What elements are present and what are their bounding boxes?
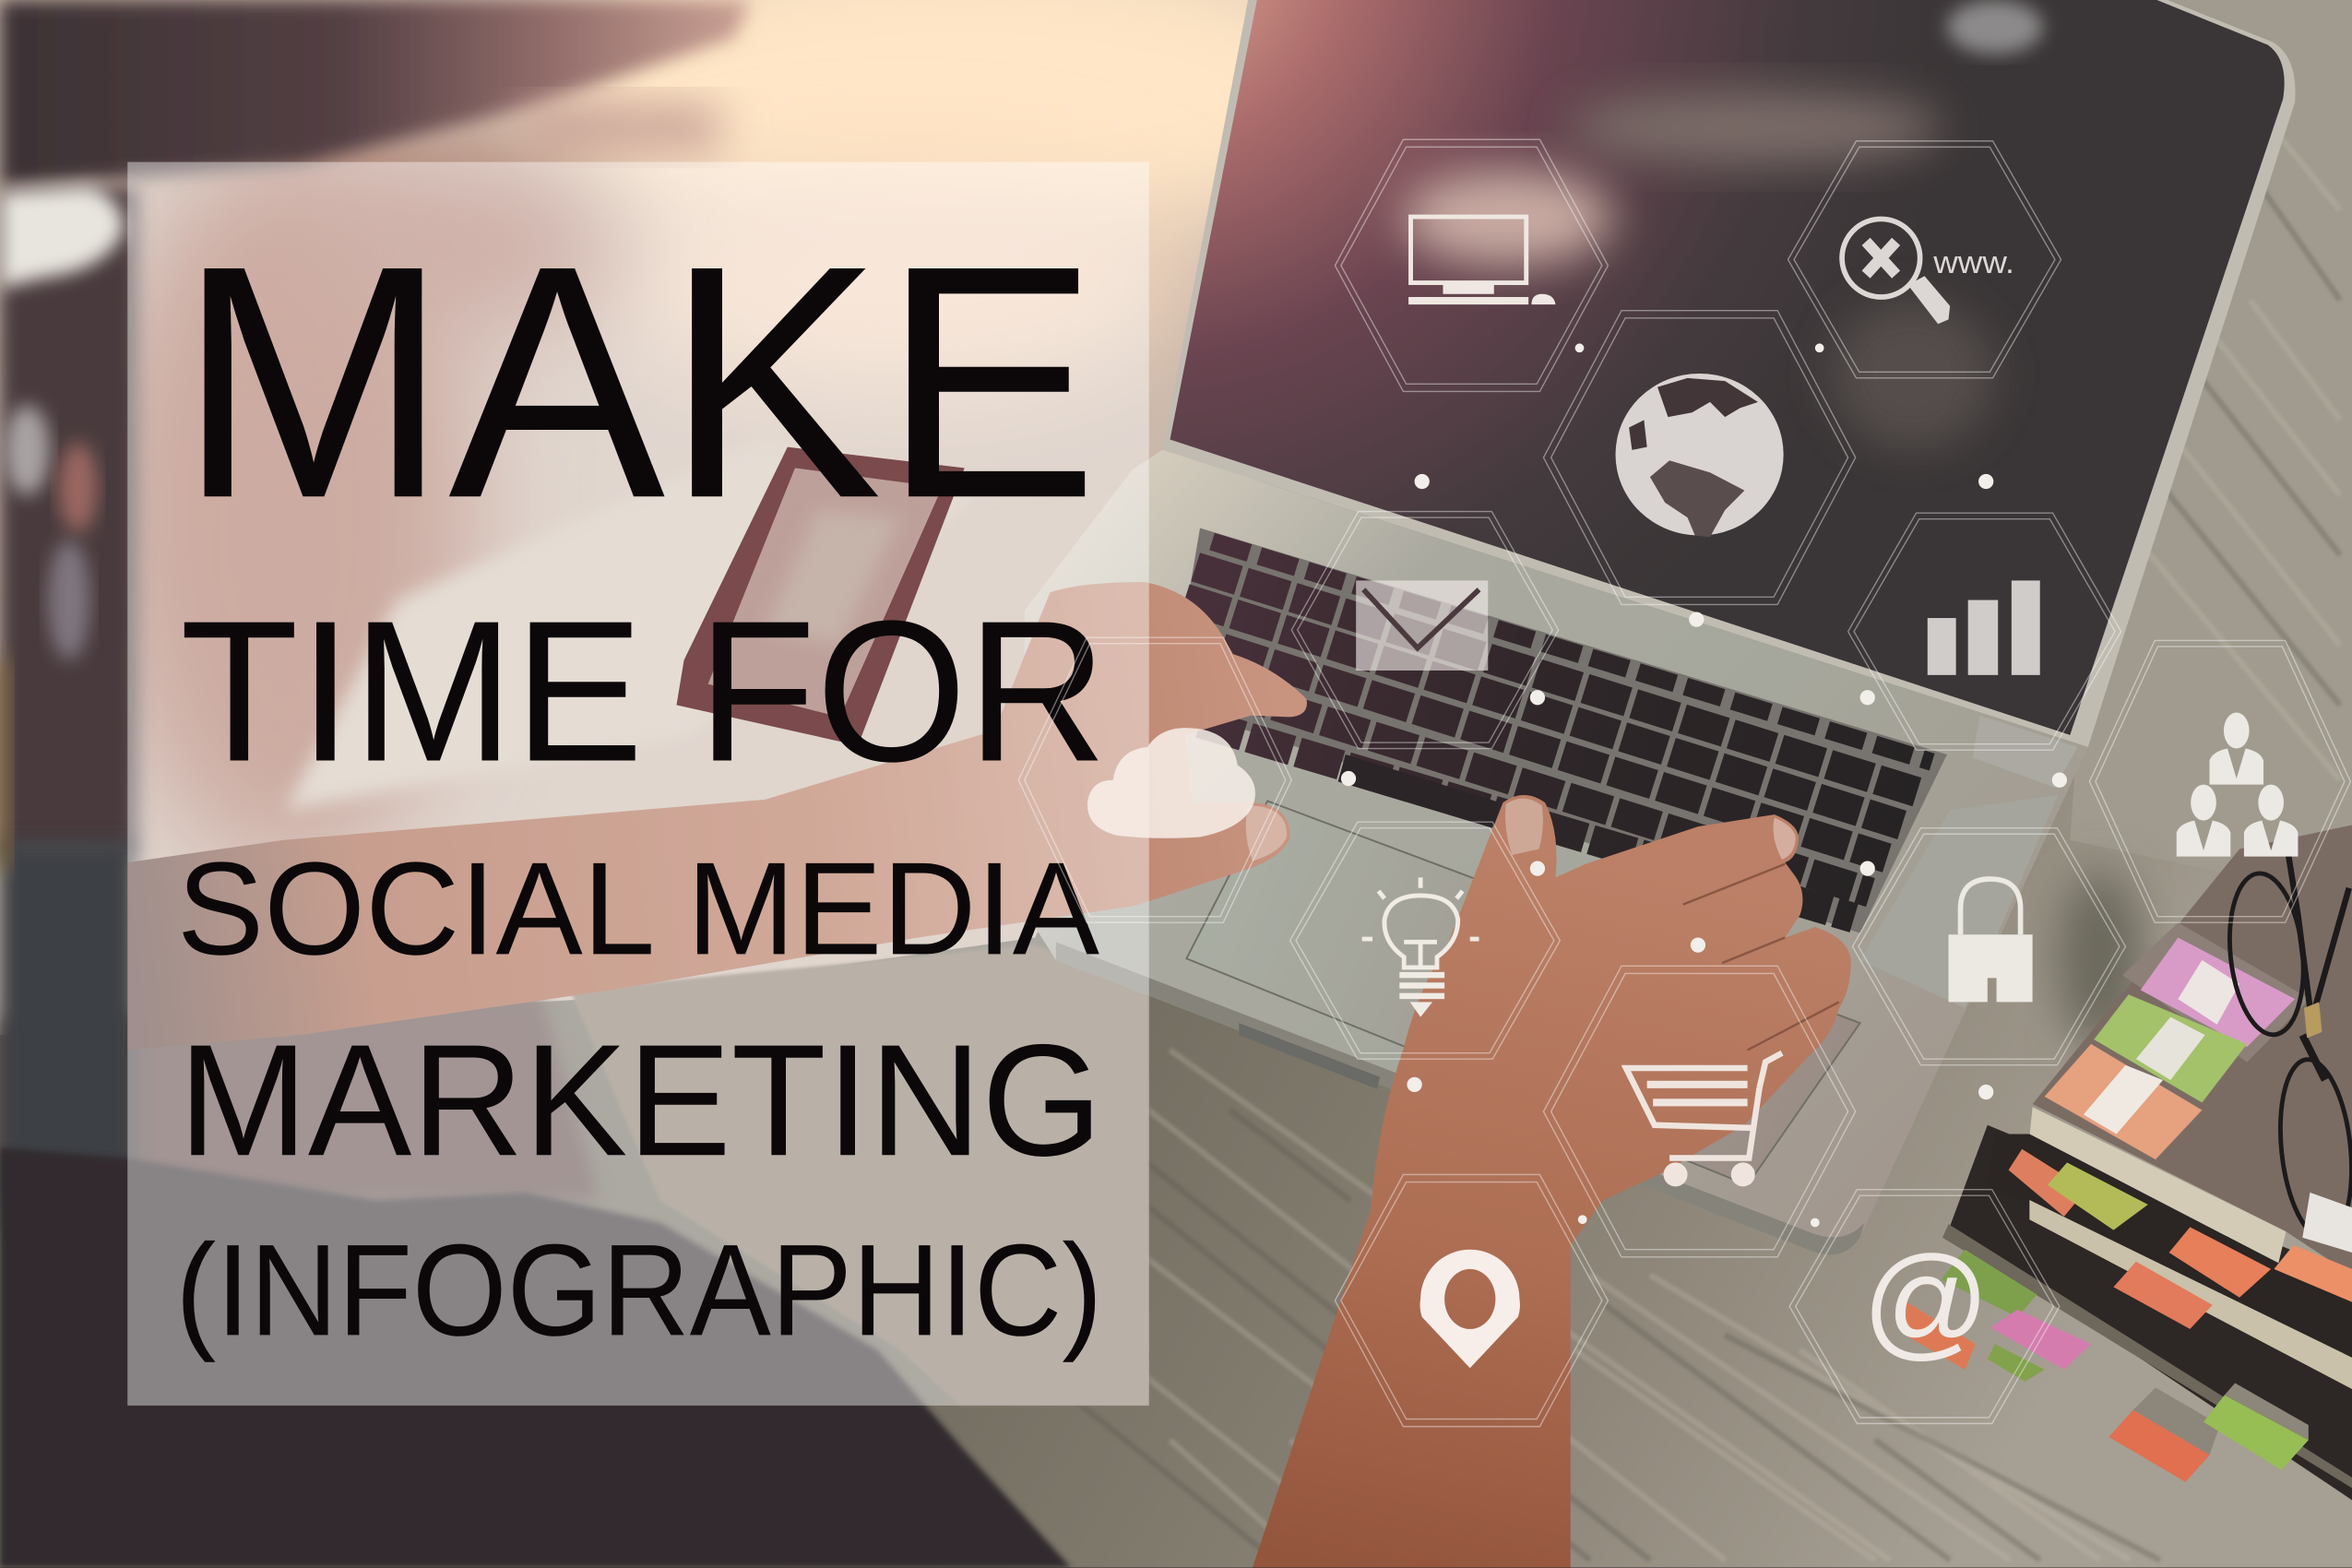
- title: [175, 197, 1107, 1362]
- right hand and forearm: [1253, 795, 1851, 1568]
- title line: (INFOGRAPHIC): (INFOGRAPHIC): [175, 1217, 1102, 1362]
- hexagon: location pin: [1335, 1174, 1608, 1427]
- hexagon: www search: [1788, 141, 2061, 378]
- hexagon: padlock: [1852, 828, 2125, 1065]
- phone on table seen through panel: [676, 447, 965, 745]
- laptop base: [1025, 450, 2088, 1255]
- left arm and hand: [127, 582, 1307, 1050]
- sticky tabs: pink: [2141, 937, 2295, 1047]
- sticky tabs: orange: [2045, 1044, 2202, 1159]
- hexagon: www search: www.: [1932, 245, 2014, 280]
- sticky tabs: green: [2094, 994, 2247, 1102]
- dark sleeve and lower left: [0, 1147, 1071, 1568]
- hexagon: cloud: [1018, 637, 1291, 922]
- hexagon: at sign: [1789, 1190, 2060, 1423]
- title line: TIME FOR: TIME FOR: [180, 580, 1107, 804]
- connector dots: [1341, 343, 2067, 1227]
- hexagon: email check: [1291, 512, 1559, 749]
- title line: MARKETING: MARKETING: [179, 1011, 1102, 1189]
- hexagon: computer: [1335, 139, 1608, 391]
- stacked notebooks with sticky tabs: [1905, 825, 2352, 1500]
- hexagon: people: [2089, 640, 2350, 922]
- hexagon: globe: [1543, 311, 1856, 604]
- hexagon: shopping cart: [1543, 966, 1856, 1257]
- title line: SOCIAL MEDIA: SOCIAL MEDIA: [177, 835, 1100, 982]
- translucent title panel: [127, 162, 1149, 1406]
- keyboard: [1170, 528, 1947, 933]
- laptop screen: [1162, 0, 2296, 747]
- hexagon network overlay: [1018, 139, 2350, 1427]
- hexagon: light bulb: [1290, 822, 1560, 1059]
- hexagon: bar chart: [1848, 513, 2121, 750]
- left blurred table and person: [0, 0, 1395, 1406]
- title line: MAKE: MAKE: [178, 197, 1099, 567]
- hexagon: at sign: @: [1862, 1229, 1990, 1371]
- eyeglasses: [2222, 849, 2352, 1242]
